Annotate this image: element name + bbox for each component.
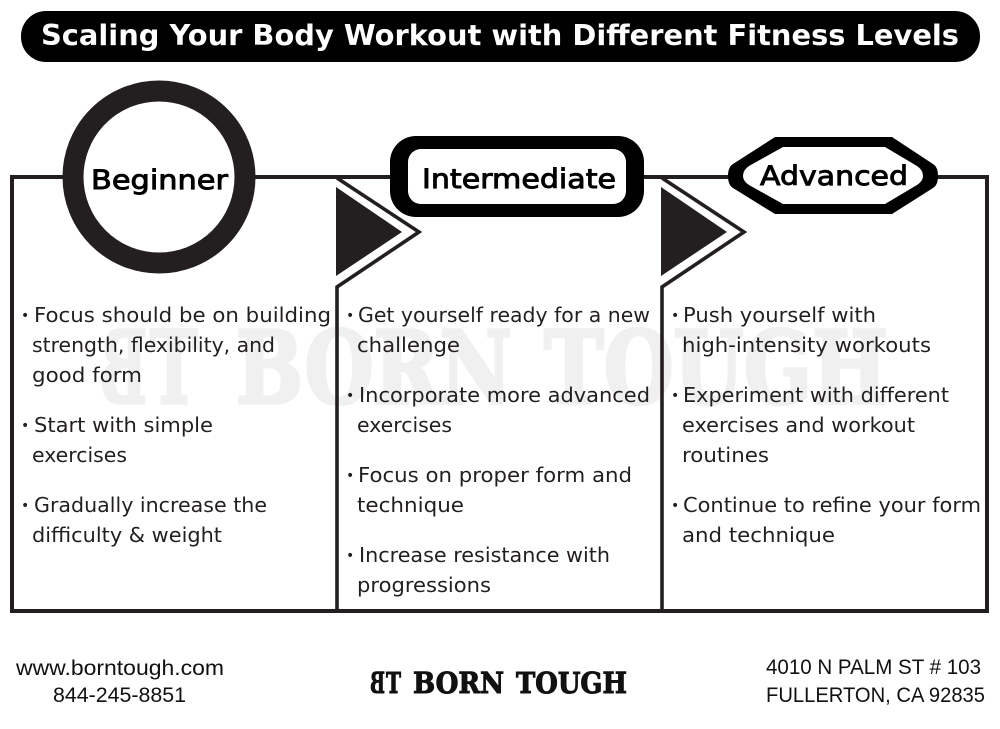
footer: logo: T	[386, 666, 401, 700]
watermark: B	[100, 309, 147, 427]
arrow 1 and column divider	[336, 178, 419, 611]
column text: intermediate: •	[346, 388, 354, 404]
watermark	[100, 309, 888, 427]
column text: advanced: routines	[682, 443, 769, 467]
column text: beginner: exercises	[32, 443, 127, 467]
column text: beginner: •	[21, 498, 29, 514]
column text: intermediate: Increase resistance with	[359, 543, 610, 567]
column text: intermediate: technique	[357, 493, 464, 517]
title banner	[21, 11, 980, 62]
footer: website and phone	[15, 657, 224, 707]
footer: logo: TOUGH	[516, 666, 627, 700]
arrow 2 and column divider	[661, 178, 744, 611]
column text: advanced	[671, 303, 981, 547]
column text: beginner: Focus should be on building	[34, 303, 331, 327]
column text: advanced: •	[671, 308, 679, 324]
title banner: Scaling Your Body Workout with Different Fitness Levels	[41, 19, 959, 52]
column text: intermediate: exercises	[357, 413, 452, 437]
footer: website and phone: 844-245-8851	[53, 684, 186, 707]
column text: advanced: Continue to refine your form	[683, 493, 981, 517]
column text: beginner	[21, 303, 331, 547]
column text: beginner: good form	[32, 363, 142, 387]
watermark: TOUGH	[544, 309, 888, 427]
column text: intermediate: Focus on proper form and	[358, 463, 632, 487]
column text: beginner: difficulty & weight	[32, 523, 222, 547]
badge: intermediate: Intermediate	[422, 164, 616, 195]
column text: advanced: and technique	[682, 523, 835, 547]
panel frame	[12, 177, 987, 611]
badge: intermediate	[390, 136, 644, 217]
badge: advanced: Advanced	[760, 161, 908, 192]
footer: address: 4010 N PALM ST # 103	[766, 656, 981, 679]
column text: beginner: Gradually increase the	[34, 493, 267, 517]
column text: advanced: •	[671, 388, 679, 404]
footer: address: FULLERTON, CA 92835	[766, 684, 985, 707]
footer: website and phone: www.borntough.com	[15, 657, 224, 680]
column text: advanced: exercises and workout	[682, 413, 915, 437]
badge: advanced	[728, 137, 938, 214]
footer: logo	[370, 666, 627, 700]
footer: logo: B	[370, 666, 385, 700]
column text: intermediate	[346, 303, 650, 597]
column text: beginner: strength, flexibility, and	[32, 333, 275, 357]
column text: intermediate: Incorporate more advanced	[359, 383, 650, 407]
column text: intermediate: •	[346, 468, 354, 484]
column text: intermediate: progressions	[357, 573, 491, 597]
column text: intermediate: challenge	[357, 333, 460, 357]
column text: beginner: •	[21, 418, 29, 434]
column text: advanced: high-intensity workouts	[682, 333, 931, 357]
footer: logo: BORN	[413, 666, 504, 700]
column text: beginner: Start with simple	[34, 413, 213, 437]
badge: beginner: Beginner	[91, 165, 229, 196]
watermark: T	[150, 309, 198, 427]
column text: beginner: •	[21, 308, 29, 324]
column text: intermediate: •	[346, 308, 354, 324]
column text: advanced: •	[671, 498, 679, 514]
footer: address	[766, 656, 985, 707]
watermark: BORN	[236, 309, 512, 427]
column text: advanced: Experiment with different	[683, 383, 949, 407]
column text: intermediate: •	[346, 548, 354, 564]
badge: beginner	[73, 91, 245, 263]
column text: intermediate: Get yourself ready for a new	[358, 303, 650, 327]
column text: advanced: Push yourself with	[683, 303, 876, 327]
